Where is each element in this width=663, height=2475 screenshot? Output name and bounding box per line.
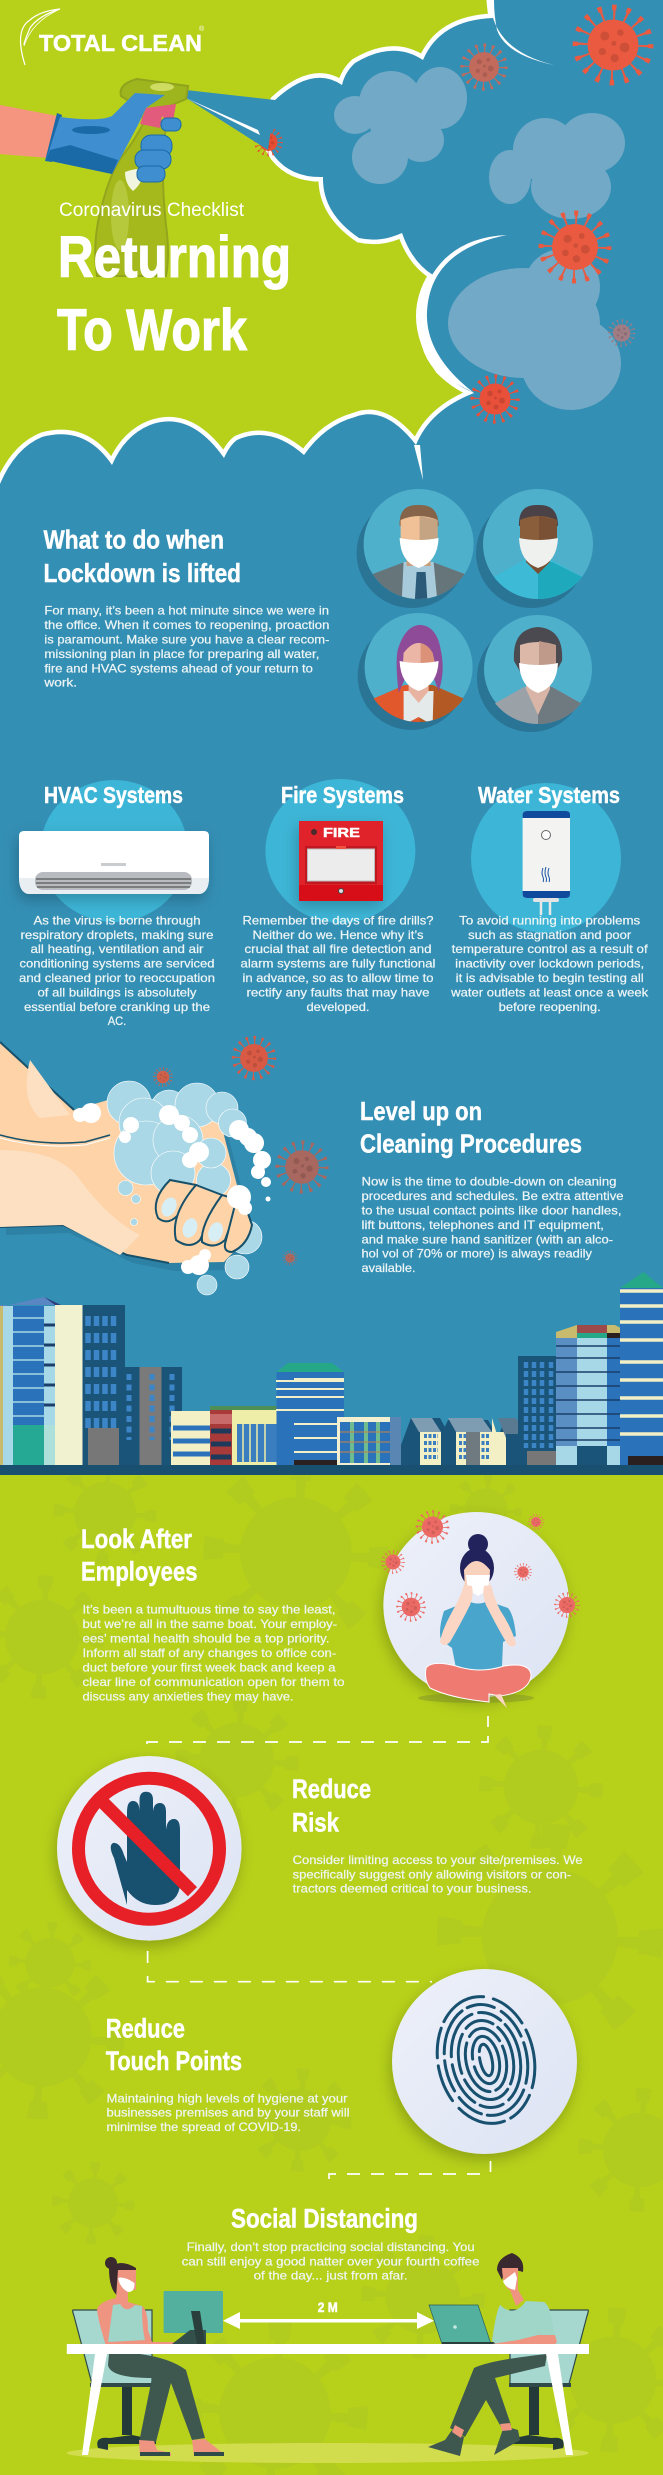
heading: Risk [292, 1808, 340, 1838]
fingers [156, 1180, 252, 1252]
viruses [255, 7, 651, 422]
spray beam [186, 90, 275, 150]
heading [106, 2013, 242, 2076]
headings: HVAC Systems [44, 782, 183, 808]
heading: Reduce [106, 2013, 185, 2043]
nails [158, 1195, 226, 1244]
body text: clear line of communication open for them to [82, 1675, 345, 1689]
text: HVAC: all heating, ventilation and air [30, 942, 204, 956]
body text: tractors deemed critical to your business. [293, 1882, 532, 1896]
illustration: washing hands [0, 1042, 271, 1295]
text: water: To avoid running into problems [459, 914, 640, 928]
body text: Inform all staff of any changes to office con- [82, 1646, 336, 1660]
title: To Work [57, 298, 248, 363]
heading: Lockdown is lifted [44, 558, 241, 588]
gloved hand [45, 93, 181, 182]
illustration: right chair [505, 2310, 588, 2450]
person 1 [357, 489, 474, 608]
title [57, 200, 291, 363]
icon: fire alarm [299, 821, 383, 901]
right towers [518, 1356, 562, 1465]
illustration: left chair [73, 2310, 156, 2450]
text: water: inactivity over lockdown periods, [455, 956, 644, 970]
icon: water heater [523, 811, 570, 915]
person 2 [476, 489, 593, 608]
heading: Reduce [292, 1774, 371, 1804]
body text: For many, it’s been a hot minute since we were in [44, 604, 329, 618]
body text: businesses premises and by your staff will [106, 2106, 350, 2120]
heading: What to do when [44, 524, 224, 554]
text: fire: rectify any faults that may have [246, 986, 430, 1000]
body text [293, 1853, 583, 1896]
body text: but we’re all in the same boat. Your employ- [82, 1617, 337, 1631]
body text: Maintaining high levels of hygiene at your [106, 2091, 348, 2105]
body text: missioning plan in place for preparing all water, [44, 647, 319, 661]
headings [44, 782, 620, 808]
heading: Look After [81, 1524, 192, 1554]
body text: of the day... just from afar. [254, 2269, 408, 2283]
icon: air conditioner [19, 831, 209, 894]
person 4 [477, 615, 592, 732]
foam blue [107, 1081, 262, 1295]
icon: fingerprint [392, 1969, 577, 2154]
connector 2 [148, 1951, 432, 1982]
body text: fire and HVAC systems ahead of your return to [44, 661, 313, 675]
illustration: laptop [429, 2305, 504, 2344]
illustration: woman at desk [97, 2257, 224, 2456]
body text: Consider limiting access to your site/premises. We [293, 1853, 583, 1867]
text: water: before reopening. [499, 1000, 601, 1014]
text: fire: crucial that all fire detection and [244, 942, 432, 956]
text: fire [240, 914, 436, 1014]
heading: Social Distancing [231, 2203, 418, 2233]
panel: look after employees [81, 1511, 579, 1708]
panel: social distancing [67, 2203, 589, 2463]
text: water [450, 914, 649, 1014]
connector 1 [147, 1716, 488, 1747]
heading [360, 1096, 582, 1159]
body text: hol vol of 70% or more) is always readily [362, 1247, 592, 1261]
body text [106, 2091, 350, 2134]
text: HVAC: AC. [108, 1014, 126, 1028]
logo: TOTAL CLEAN [39, 30, 202, 56]
heading [44, 524, 241, 588]
houses [401, 1418, 451, 1465]
illustration: city skyline [0, 1272, 663, 1475]
body text: work. [43, 676, 77, 690]
person 3 [358, 613, 473, 730]
heading: Touch Points [106, 2046, 242, 2076]
title: Coronavirus Checklist [59, 200, 245, 221]
spray cloud [0, 0, 663, 560]
cloud inner crescents [414, 0, 554, 480]
green background viruses [0, 1467, 663, 2475]
body text: It’s been a tumultuous time to say the least, [82, 1603, 336, 1617]
heading: Level up on [360, 1096, 482, 1126]
illustration: monitor [164, 2291, 223, 2344]
title: Returning [58, 225, 291, 290]
text: fire: alarm systems are fully functional [240, 956, 436, 970]
body text: procedures and schedules. Be extra attentive [362, 1189, 624, 1203]
arm [0, 105, 58, 158]
body text: can still enjoy a good natter over your fourth coffee [182, 2254, 480, 2268]
heading: Cleaning Procedures [360, 1129, 582, 1159]
body text: available. [362, 1261, 416, 1275]
headings: Fire Systems [281, 782, 404, 808]
body text [43, 604, 329, 690]
spray bottle [95, 79, 188, 276]
body text: discuss any anxieties they may have. [82, 1689, 294, 1703]
viruses [154, 1037, 327, 1265]
panel: what to do when lockdown is lifted [43, 489, 593, 732]
body text: to the usual contact points like door handles, [362, 1203, 622, 1217]
body text: lift buttons, telephones and IT equipment, [362, 1218, 604, 1232]
body text: duct before your first week back and keep a [82, 1660, 336, 1674]
body text [82, 1603, 345, 1703]
text: HVAC: essential before cranking up the [24, 1000, 210, 1014]
text: HVAC [19, 914, 215, 1028]
panel: systems [19, 779, 649, 1028]
foam white [73, 1103, 271, 1275]
text: HVAC: conditioning systems are serviced [20, 956, 214, 970]
heading [81, 1524, 198, 1587]
text: HVAC: respiratory droplets, making sure [20, 928, 214, 942]
floor ellipse [67, 2443, 589, 2463]
body text: and make sure hand sanitizer (with an alco- [362, 1232, 613, 1246]
icon: no entry hand [57, 1756, 242, 1941]
illustration: man at desk [428, 2253, 557, 2456]
left towers [0, 1297, 61, 1307]
body text: minimise the spread of COVID-19. [106, 2120, 301, 2134]
text: HVAC: and cleaned prior to reoccupation [19, 971, 215, 985]
panel: hero [0, 0, 663, 560]
illustration: masked woman [382, 1511, 579, 1708]
circles [40, 779, 621, 933]
panel: reduce risk [57, 1756, 583, 1941]
panel: reduce touch points [106, 1969, 577, 2154]
body text: specifically suggest only allowing visitors or con- [293, 1867, 571, 1881]
text: fire: in advance, so as to allow time to [242, 971, 434, 985]
heading [292, 1774, 371, 1838]
body text: is paramount. Make sure you have a clear recom- [44, 632, 329, 646]
viruses [382, 1511, 579, 1621]
text: fire: developed. [306, 1000, 370, 1014]
heading: Employees [81, 1557, 198, 1587]
text: water: water outlets at least once a week [450, 986, 649, 1000]
arrow: 2 metres [223, 2312, 434, 2329]
logo: ® [199, 25, 205, 33]
icon: fire alarm: FIRE [323, 826, 360, 840]
body text: Finally, don’t stop practicing social distancing. You [187, 2240, 475, 2254]
background clouds [334, 67, 625, 410]
panel: cleaning procedures [0, 1037, 624, 1295]
text: water: it is advisable to begin testing all [456, 971, 644, 985]
illustration: desk [67, 2344, 589, 2455]
distance label: 2 M [318, 2300, 338, 2315]
text: HVAC: of all buildings is absolutely [38, 986, 196, 1000]
body text [182, 2240, 480, 2283]
logo [21, 9, 205, 65]
text: fire: Remember the days of fire drills? [242, 914, 434, 928]
body text: Now is the time to double-down on cleaning [362, 1175, 616, 1189]
centre low blocks [171, 1411, 210, 1465]
text: water: such as stagnation and poor [468, 928, 631, 942]
blue section background [0, 505, 663, 1470]
body text: the office. When it comes to reopening, proaction [44, 618, 329, 632]
headings: Water Systems [478, 782, 620, 808]
text: fire: Neither do we. Hence why it’s [252, 928, 424, 942]
connector 3 [329, 2161, 490, 2179]
text: HVAC: As the virus is borne through [34, 914, 200, 928]
text: water: temperature control as a result of [452, 942, 648, 956]
body text: ees’ mental health should be a top priority. [82, 1632, 330, 1646]
body text [362, 1175, 624, 1275]
ground band [0, 1465, 663, 1475]
